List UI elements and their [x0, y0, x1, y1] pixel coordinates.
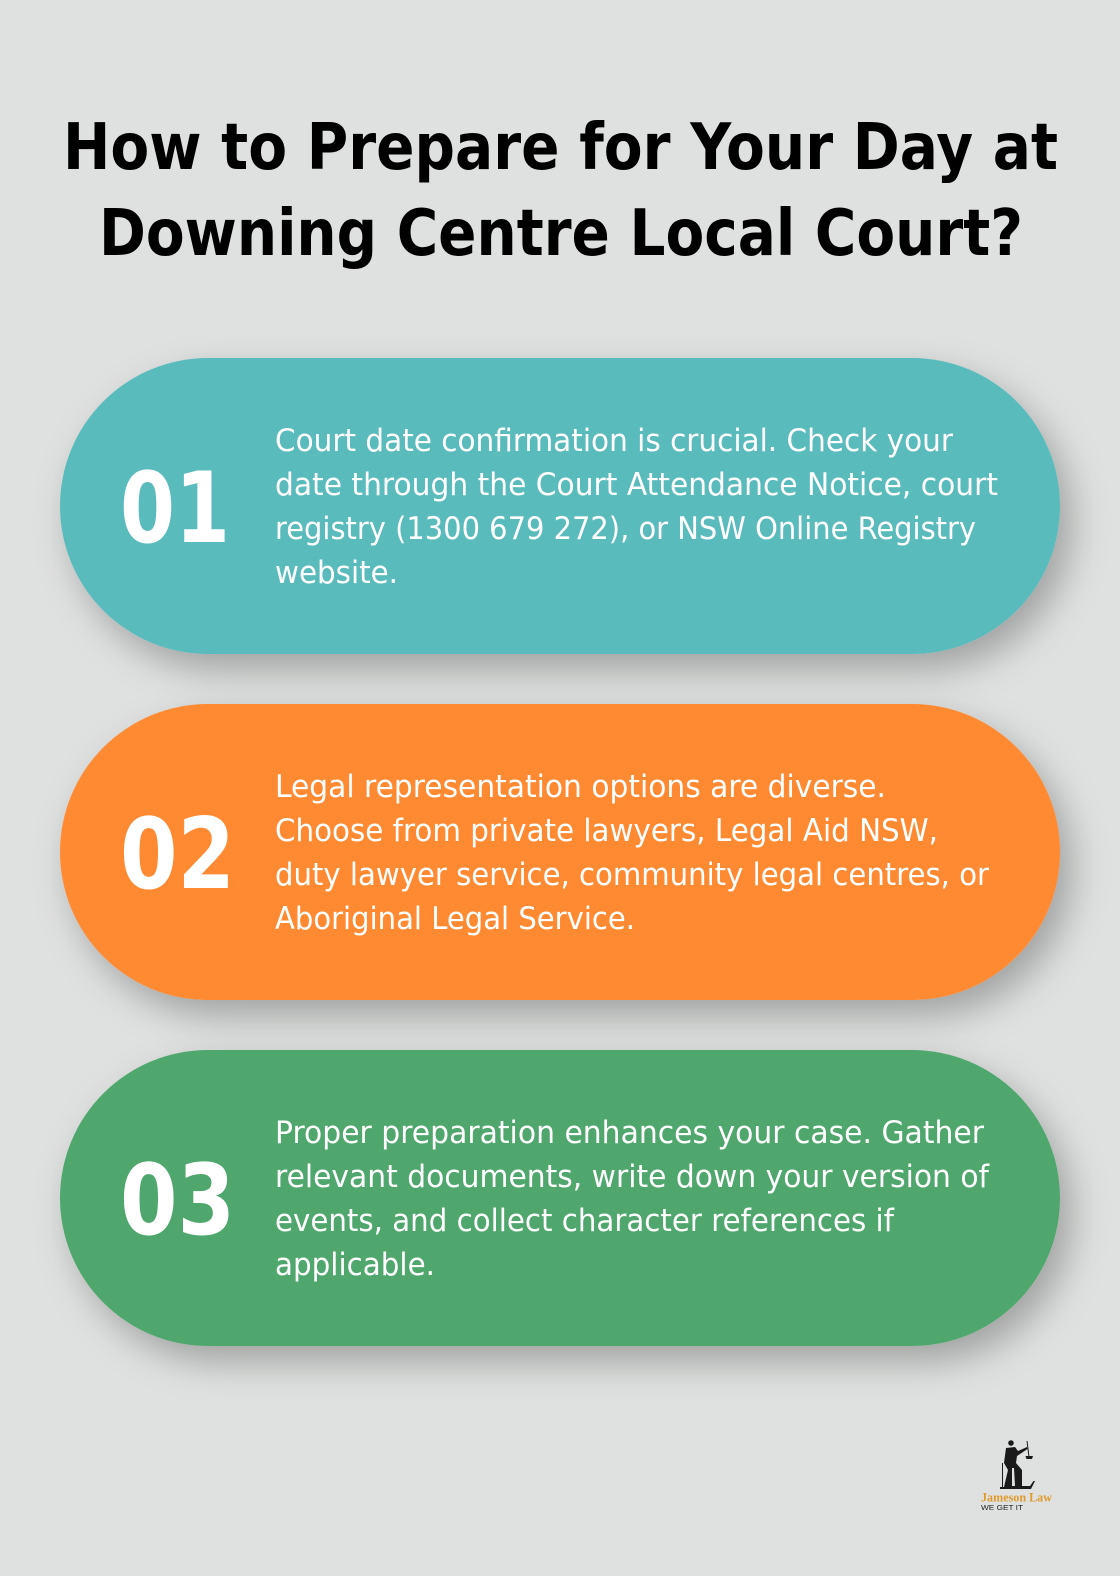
title: Downing Centre Local Court?: [99, 197, 1023, 271]
logo: Jameson Law: [981, 1440, 1052, 1512]
logo tagline: WE GET IT: [981, 1503, 1023, 1512]
step 01 text: [275, 423, 998, 591]
logo wordmark: Jameson Law: [981, 1490, 1052, 1504]
number 03: 03: [120, 1144, 235, 1258]
teal pill background: [60, 358, 1060, 654]
step 03 text: Proper preparation enhances your case. Gather: [275, 1115, 984, 1151]
orange pill background: [60, 704, 1060, 1000]
panel: step 03: [60, 1050, 1060, 1346]
icon: lady justice with scales: [1000, 1440, 1035, 1489]
step 02 text: Aboriginal Legal Service.: [275, 901, 635, 937]
panel: step 02: [60, 704, 1060, 1000]
step 03 text: events, and collect character references if: [275, 1203, 895, 1239]
step 02 text: Choose from private lawyers, Legal Aid NSW,: [275, 813, 938, 849]
title: [63, 111, 1058, 271]
step 02 text: duty lawyer service, community legal centres, or: [275, 857, 989, 893]
step 03 text: relevant documents, write down your version of: [275, 1159, 990, 1195]
step 03 text: applicable.: [275, 1247, 435, 1283]
step 01 text: date through the Court Attendance Notice, court: [275, 467, 998, 503]
number 01: 01: [120, 452, 230, 566]
number 02: 02: [120, 798, 235, 912]
green pill background: [60, 1050, 1060, 1346]
step 01 text: registry (1300 679 272), or NSW Online Registry: [275, 511, 976, 547]
step 02 text: [275, 769, 989, 937]
panel: step 01: [60, 358, 1060, 654]
step 01 text: website.: [275, 555, 398, 591]
step 03 text: [275, 1115, 990, 1283]
step 01 text: Court date confirmation is crucial. Check your: [275, 423, 953, 459]
step 02 text: Legal representation options are diverse.: [275, 769, 886, 805]
